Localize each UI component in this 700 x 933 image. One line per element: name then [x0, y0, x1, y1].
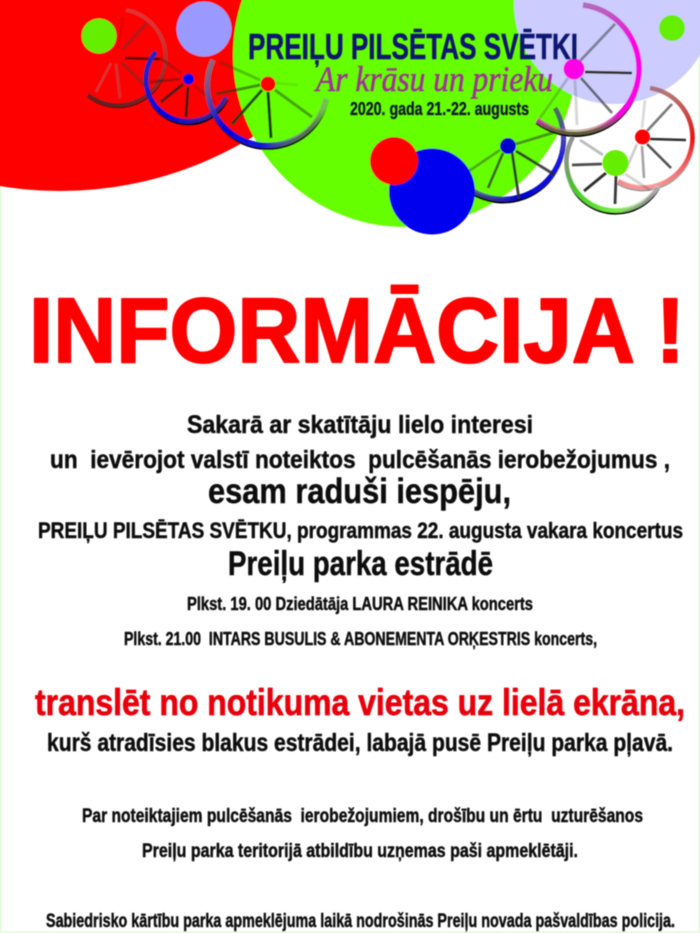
- circle: lavender top: [176, 2, 232, 56]
- event title: PREIĻU PILSĒTAS SVĒTKI: [248, 26, 578, 67]
- circle: big blue: [389, 148, 475, 234]
- wheel: blue left: [146, 52, 226, 123]
- wheel: red right: [618, 88, 693, 189]
- intro line 1: Sakarā ar skatītāju lielo interesi: [187, 411, 533, 439]
- date: 2020. gada 21.-22. augusts: [350, 99, 529, 119]
- hub: green right: [602, 150, 628, 176]
- wheel: faded red: [88, 10, 166, 107]
- main heading: INFORMĀCIJA !: [29, 280, 685, 382]
- circle: small green top right: [659, 15, 685, 41]
- circle: big red: [370, 137, 418, 185]
- wheel: blue right: [452, 108, 564, 201]
- hub: red right: [635, 130, 650, 144]
- responsibility line 2: Preiļu parka teritorijā atbildību uzņemas paši apmeklētāji.: [142, 841, 578, 862]
- body text block: [35, 411, 685, 932]
- hub: blue right: [500, 138, 516, 154]
- wheel: green right: [566, 137, 658, 212]
- hub: red: [260, 76, 276, 92]
- slogan: Ar krāsu un prieku: [314, 59, 553, 99]
- header artwork: circles and wheels: [0, 0, 700, 234]
- hub: blue: [183, 74, 194, 84]
- wheel: magenta: [537, 5, 639, 134]
- circle: lavender top right: [514, 0, 700, 104]
- header title: [248, 26, 578, 119]
- intro line 3: esam raduši iespēju,: [208, 472, 511, 511]
- wheel: blue and green centre: [207, 60, 326, 147]
- circle: large green: [233, 0, 577, 227]
- concert 1: Plkst. 19. 00 Dziedātāja LAURA REINIKA koncerts: [187, 593, 533, 614]
- hub: magenta: [564, 58, 584, 80]
- circle: large red: [0, 0, 430, 191]
- circle: small green top left: [82, 18, 116, 54]
- venue line: Preiļu parka estrādē: [228, 545, 493, 583]
